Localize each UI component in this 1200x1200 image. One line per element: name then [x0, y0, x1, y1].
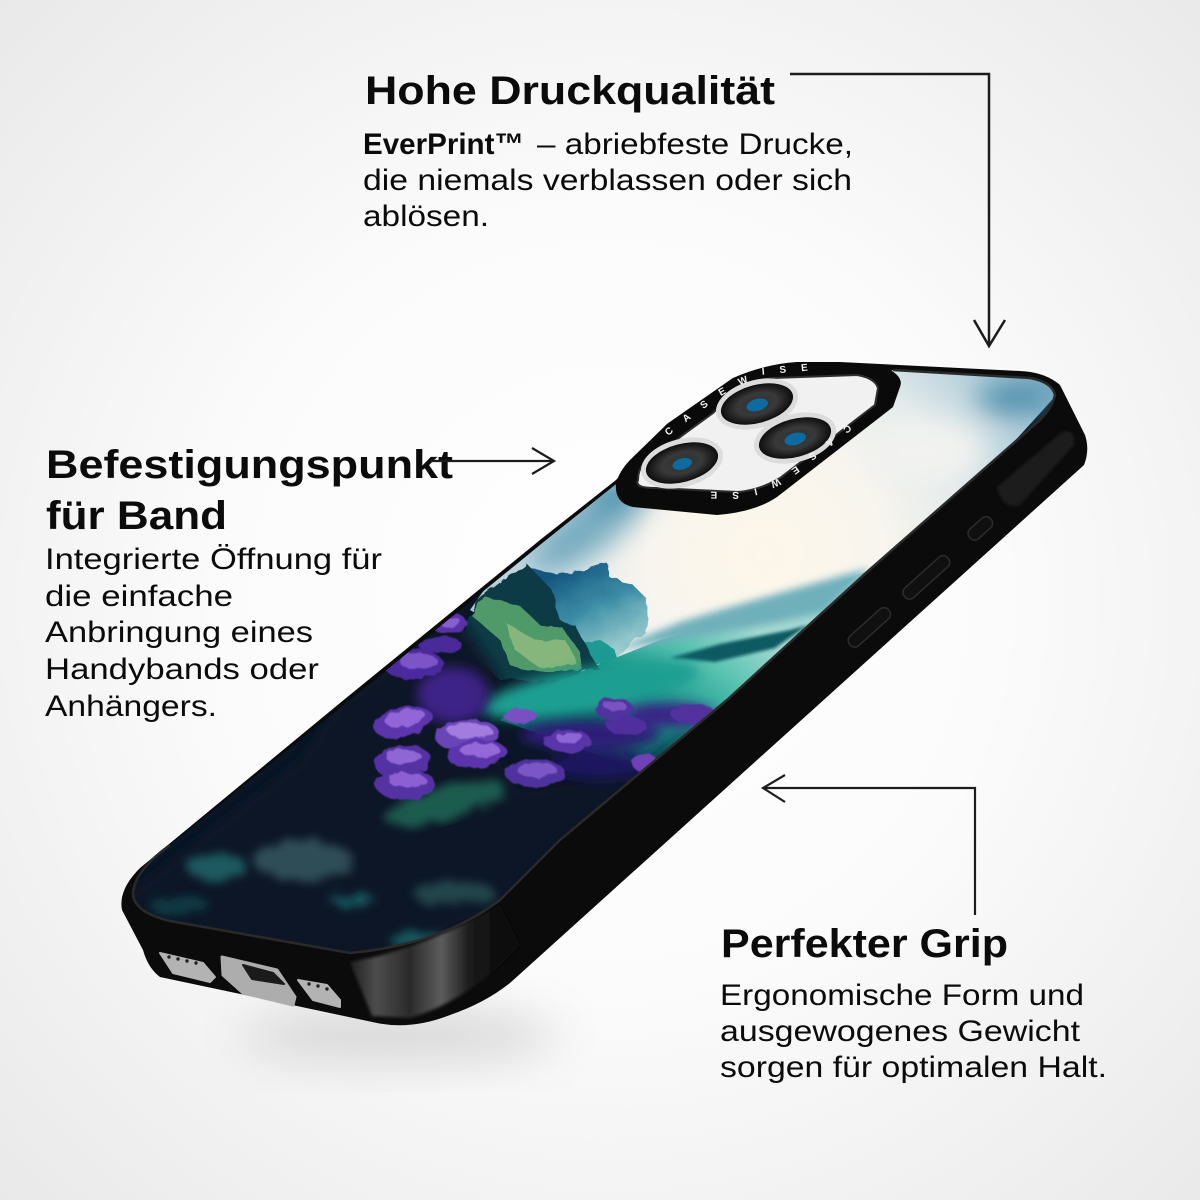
dark foreground — [454, 622, 692, 758]
lens top — [710, 370, 804, 438]
sky clouds — [515, 384, 1053, 592]
corner highlight — [350, 905, 520, 1018]
sky — [470, 370, 1054, 672]
brand text on ring: CASEWISE — [665, 364, 808, 435]
callout: strap attachment — [45, 443, 453, 723]
body text: Integrierte Öffnung für — [45, 543, 382, 576]
lens right — [748, 404, 842, 472]
body text — [720, 979, 1107, 1084]
body text: EverPrint™ — [363, 128, 524, 161]
green hill — [455, 562, 600, 680]
far hills — [613, 568, 870, 650]
camera ring — [616, 362, 901, 515]
body text: Ergonomische Form und — [720, 979, 1084, 1012]
body text: ablösen. — [363, 200, 489, 233]
dark blots — [150, 840, 495, 947]
body text: ausgewogenes Gewicht — [720, 1015, 1081, 1048]
heading: für Band — [46, 494, 227, 538]
body text: – abriebfeste Drucke, — [537, 128, 853, 161]
side button: volume — [900, 553, 952, 602]
brand text on ring: CASEWISE — [710, 426, 851, 499]
brand text on ring — [665, 364, 851, 499]
printed artwork — [120, 360, 1070, 970]
strap attachment — [997, 431, 1074, 506]
body text: Anhängers. — [45, 690, 217, 723]
arrow: grip — [763, 775, 975, 915]
violet haze — [417, 667, 715, 779]
heading: Befestigungspunkt — [46, 443, 453, 487]
grass lower — [381, 771, 509, 835]
heading: Hohe Druckqualität — [365, 69, 775, 113]
teal field — [500, 571, 866, 761]
heading: Perfekter Grip — [721, 922, 1008, 966]
camera glass plate — [637, 375, 878, 492]
callout: print quality — [363, 69, 853, 233]
heading — [46, 443, 453, 538]
teal grass — [478, 649, 702, 731]
mountains — [528, 563, 650, 668]
body text: sorgen für optimalen Halt. — [720, 1051, 1107, 1084]
body text: die niemals verblassen oder sich — [363, 164, 852, 197]
phone case — [121, 362, 1088, 1026]
arrow: print quality — [790, 74, 1005, 346]
charging port — [222, 957, 295, 1005]
flowers — [371, 613, 715, 800]
case body — [121, 362, 1087, 1025]
case rim — [133, 370, 1055, 953]
speaker grille right — [298, 980, 340, 1007]
body text: Handybands oder — [45, 653, 319, 686]
lens left — [635, 429, 729, 497]
dark hill — [670, 625, 808, 662]
side button: action — [846, 605, 893, 650]
body text — [45, 543, 382, 723]
arrow: strap attachment — [430, 448, 554, 474]
side button: small — [966, 514, 995, 543]
callout: grip — [720, 922, 1107, 1084]
phone shadow — [240, 1013, 560, 1057]
body text: die einfache — [45, 580, 233, 613]
speaker grille left — [160, 953, 215, 982]
body text — [363, 128, 853, 233]
body text: Anbringung eines — [45, 616, 313, 649]
